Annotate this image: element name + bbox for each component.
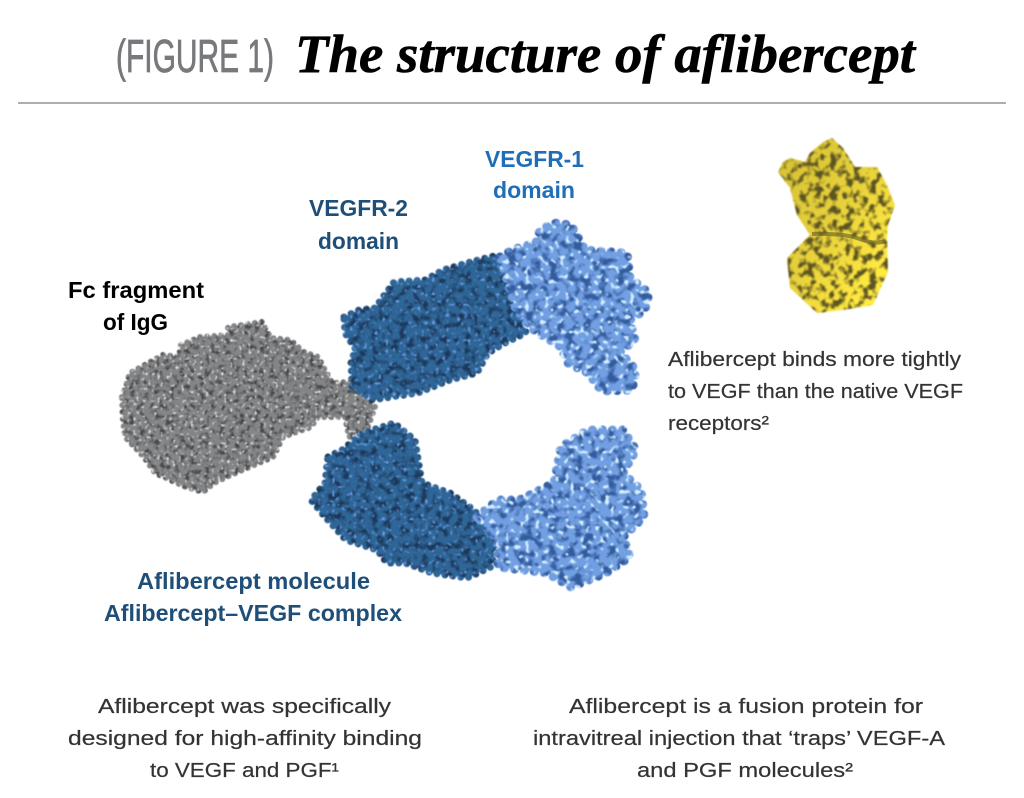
caption: molecule and complex: Aflibercept molecule <box>137 568 370 594</box>
VEGFR-1 domain, lower <box>477 430 644 587</box>
text: design note <box>68 696 422 782</box>
label: VEGFR-2 domain: VEGFR-2 <box>309 195 408 221</box>
text: design note: designed for high-affinity binding <box>68 728 422 750</box>
text: fusion protein note: Aflibercept is a fusion protein for <box>569 696 923 718</box>
text: fusion protein note <box>533 696 946 782</box>
VEGF molecule, yellow <box>778 138 895 313</box>
text: binding note: to VEGF than the native VEGF <box>668 381 963 403</box>
label: Fc fragment of IgG: Fc fragment <box>68 277 204 303</box>
figure heading: The structure of aflibercept <box>295 24 917 84</box>
text: binding note <box>668 349 963 435</box>
caption: molecule and complex: Aflibercept–VEGF complex <box>104 600 402 626</box>
text: fusion protein note: and PGF molecules² <box>637 760 853 782</box>
label: Fc fragment of IgG <box>68 277 204 335</box>
label: VEGFR-2 domain: domain <box>318 228 399 254</box>
Fc fragment, grey <box>122 322 375 492</box>
text: binding note: Aflibercept binds more tightly <box>668 349 961 371</box>
figure label: (FIGURE 1) <box>116 30 274 82</box>
label: Fc fragment of IgG: of IgG <box>103 309 168 335</box>
VEGFR-2 domain, lower <box>311 423 498 578</box>
aflibercept molecule <box>122 223 649 587</box>
text: design note: Aflibercept was specifically <box>98 696 391 718</box>
VEGFR-1 domain, upper <box>500 223 649 391</box>
VEGFR-2 domain, upper <box>344 255 526 400</box>
caption: molecule and complex <box>104 568 402 626</box>
label: VEGFR-1 domain: VEGFR-1 <box>485 146 584 172</box>
title <box>116 24 917 84</box>
text: binding note: receptors² <box>668 413 769 435</box>
label: VEGFR-2 domain <box>309 195 408 254</box>
label: VEGFR-1 domain: domain <box>493 177 575 203</box>
text: fusion protein note: intravitreal injection that ‘traps’ VEGF-A <box>533 728 946 750</box>
label: VEGFR-1 domain <box>485 146 584 203</box>
text: design note: to VEGF and PGF¹ <box>150 760 339 782</box>
